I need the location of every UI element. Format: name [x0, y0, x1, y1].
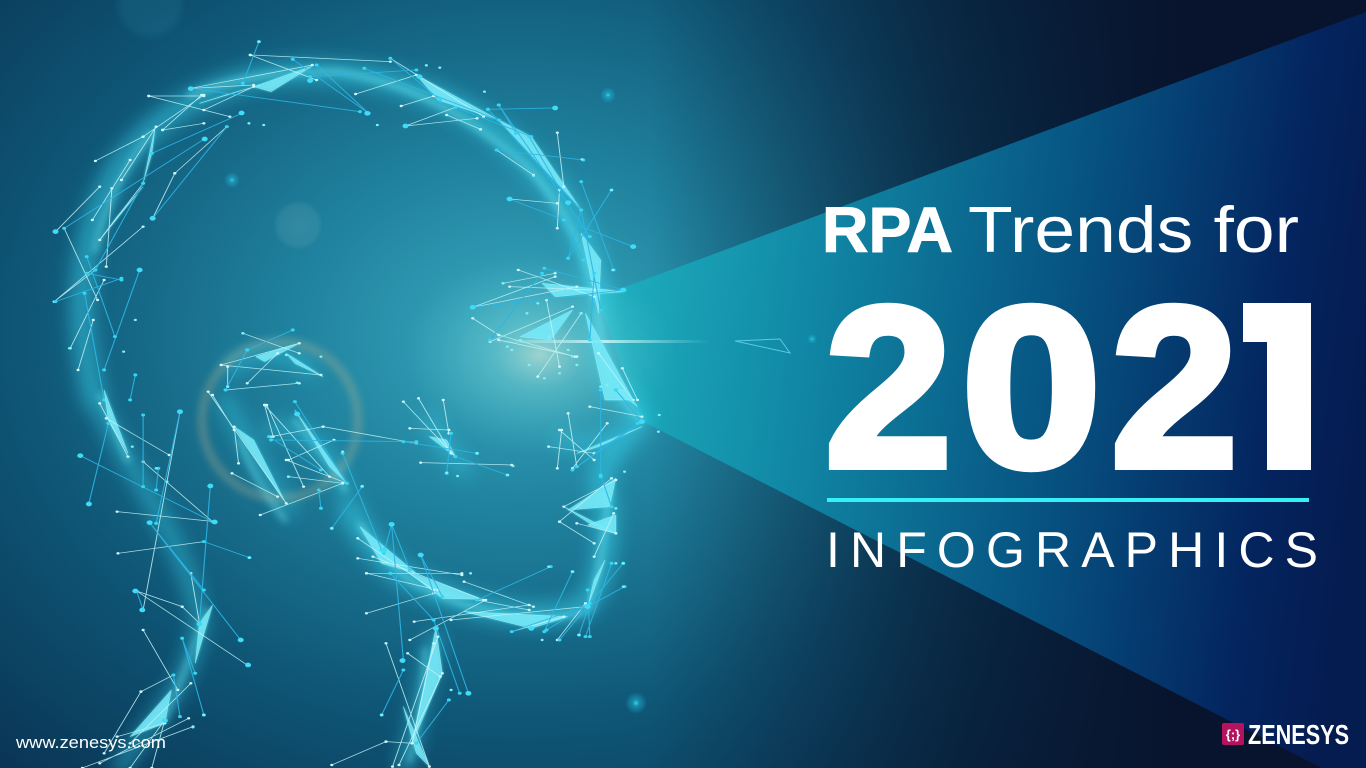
horizontal light streak	[490, 340, 710, 343]
heading: 2021: 1	[1221, 261, 1348, 515]
icon: logo badge: {;}	[1226, 727, 1240, 742]
bright inner glow along mesh	[95, 72, 640, 760]
cyan divider line	[827, 498, 1309, 502]
small triangle mesh on beam	[735, 339, 790, 353]
heading: 2021: 2	[1111, 261, 1238, 515]
head network: face, jaw, neck and shoulder	[80, 390, 659, 768]
website url: www.zenesys.com	[15, 734, 166, 752]
heading: 2021	[828, 302, 1311, 472]
heading: 2021: 0	[962, 260, 1101, 515]
subheading: INFOGRAPHICS: INFOGRAPHICS	[826, 522, 1318, 578]
head glow outline	[82, 72, 640, 768]
light beam from head	[598, 12, 1366, 768]
Zenesys logo	[1222, 719, 1349, 750]
nose light flare	[405, 255, 675, 455]
heading: RPA Trends for: Trends for	[968, 193, 1299, 266]
head network: upper skull, nose and eye	[54, 42, 638, 400]
heading: RPA Trends for	[822, 193, 1299, 266]
heading: 2021: 2	[825, 261, 952, 515]
faint bokeh lights	[118, 0, 817, 714]
lens ring around eye	[202, 342, 358, 498]
heading: RPA Trends for: RPA	[822, 194, 953, 266]
